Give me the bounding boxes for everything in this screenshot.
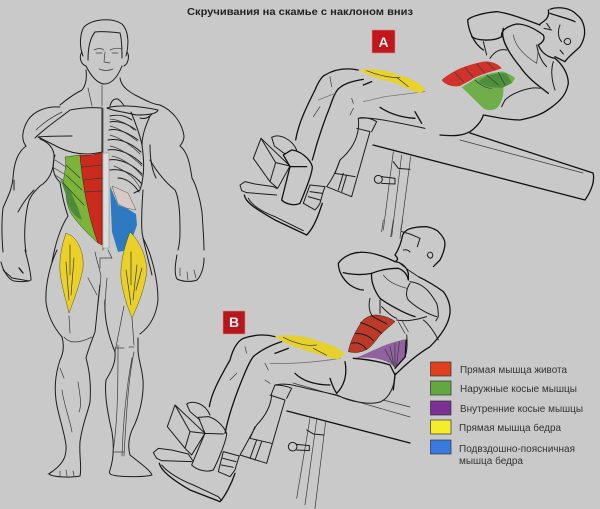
purple muscle B [353, 339, 406, 390]
muscle: rectus femoris left yellow [60, 233, 83, 313]
green muscle A [462, 72, 515, 110]
figure B: bench [287, 373, 410, 443]
figure A: bench [373, 133, 594, 200]
legend item: iliopsoas [430, 440, 575, 467]
bench post and pin [288, 418, 326, 508]
front anatomy figure [1, 20, 204, 477]
badge B [223, 311, 245, 334]
neck and shoulders [60, 70, 160, 105]
figure B: upper body [338, 220, 450, 390]
torso and arms [440, 12, 568, 136]
arms and torso [338, 252, 450, 375]
legend item: iliopsoas: Подвздошно-поясничная [459, 444, 575, 455]
right leg [105, 300, 152, 477]
left deltoid and chest [23, 107, 102, 154]
figure A: upper body [440, 8, 585, 136]
figure B: legs and equipment [153, 335, 346, 508]
spine [103, 153, 109, 248]
title: Скручивания на скамье с наклоном вниз [187, 6, 413, 18]
legend item: rectus abdominis [430, 362, 567, 376]
ribcage [107, 99, 158, 193]
left arm [2, 139, 54, 252]
figure A: legs and equipment [240, 69, 425, 238]
right arm [150, 105, 204, 250]
legend [430, 362, 583, 467]
lower leg and thigh [296, 69, 425, 197]
legend item: rectus femoris: Прямая мышца бедра [459, 422, 561, 434]
badge B: B [229, 314, 239, 330]
badge A [372, 30, 395, 53]
muscle: external obliques green [60, 155, 98, 243]
foot pads [253, 136, 312, 205]
legend item: external obliques [430, 381, 577, 395]
right fist [175, 255, 204, 281]
legend item: rectus abdominis: Прямая мышца живота [460, 365, 567, 376]
legend item: iliopsoas: мышца бедра [459, 455, 523, 467]
head [80, 20, 128, 84]
torso sides [52, 155, 68, 262]
muscle: rectus abdominis red [80, 152, 102, 245]
muscle: rectus femoris right yellow [121, 232, 147, 318]
hips [46, 238, 158, 337]
left leg [49, 285, 100, 477]
badge A: A [378, 34, 389, 50]
legend item: internal obliques: Внутренние косые мышцы [460, 404, 583, 415]
red muscle A [442, 62, 502, 86]
figure A: yellow muscle [358, 69, 426, 93]
shoe [153, 448, 239, 502]
head [540, 8, 585, 62]
legend item: rectus femoris [430, 420, 561, 434]
lower leg and thigh [209, 335, 346, 463]
head [382, 220, 445, 276]
left fist [1, 250, 31, 282]
muscle: iliopsoas blue [110, 186, 137, 252]
legend item: external obliques: Наружные косые мышцы [460, 384, 577, 395]
red muscle B [348, 315, 395, 352]
legend item: internal obliques [430, 401, 583, 415]
shoe [240, 182, 325, 235]
bench post and pin [374, 152, 411, 238]
foot pads [167, 402, 227, 471]
